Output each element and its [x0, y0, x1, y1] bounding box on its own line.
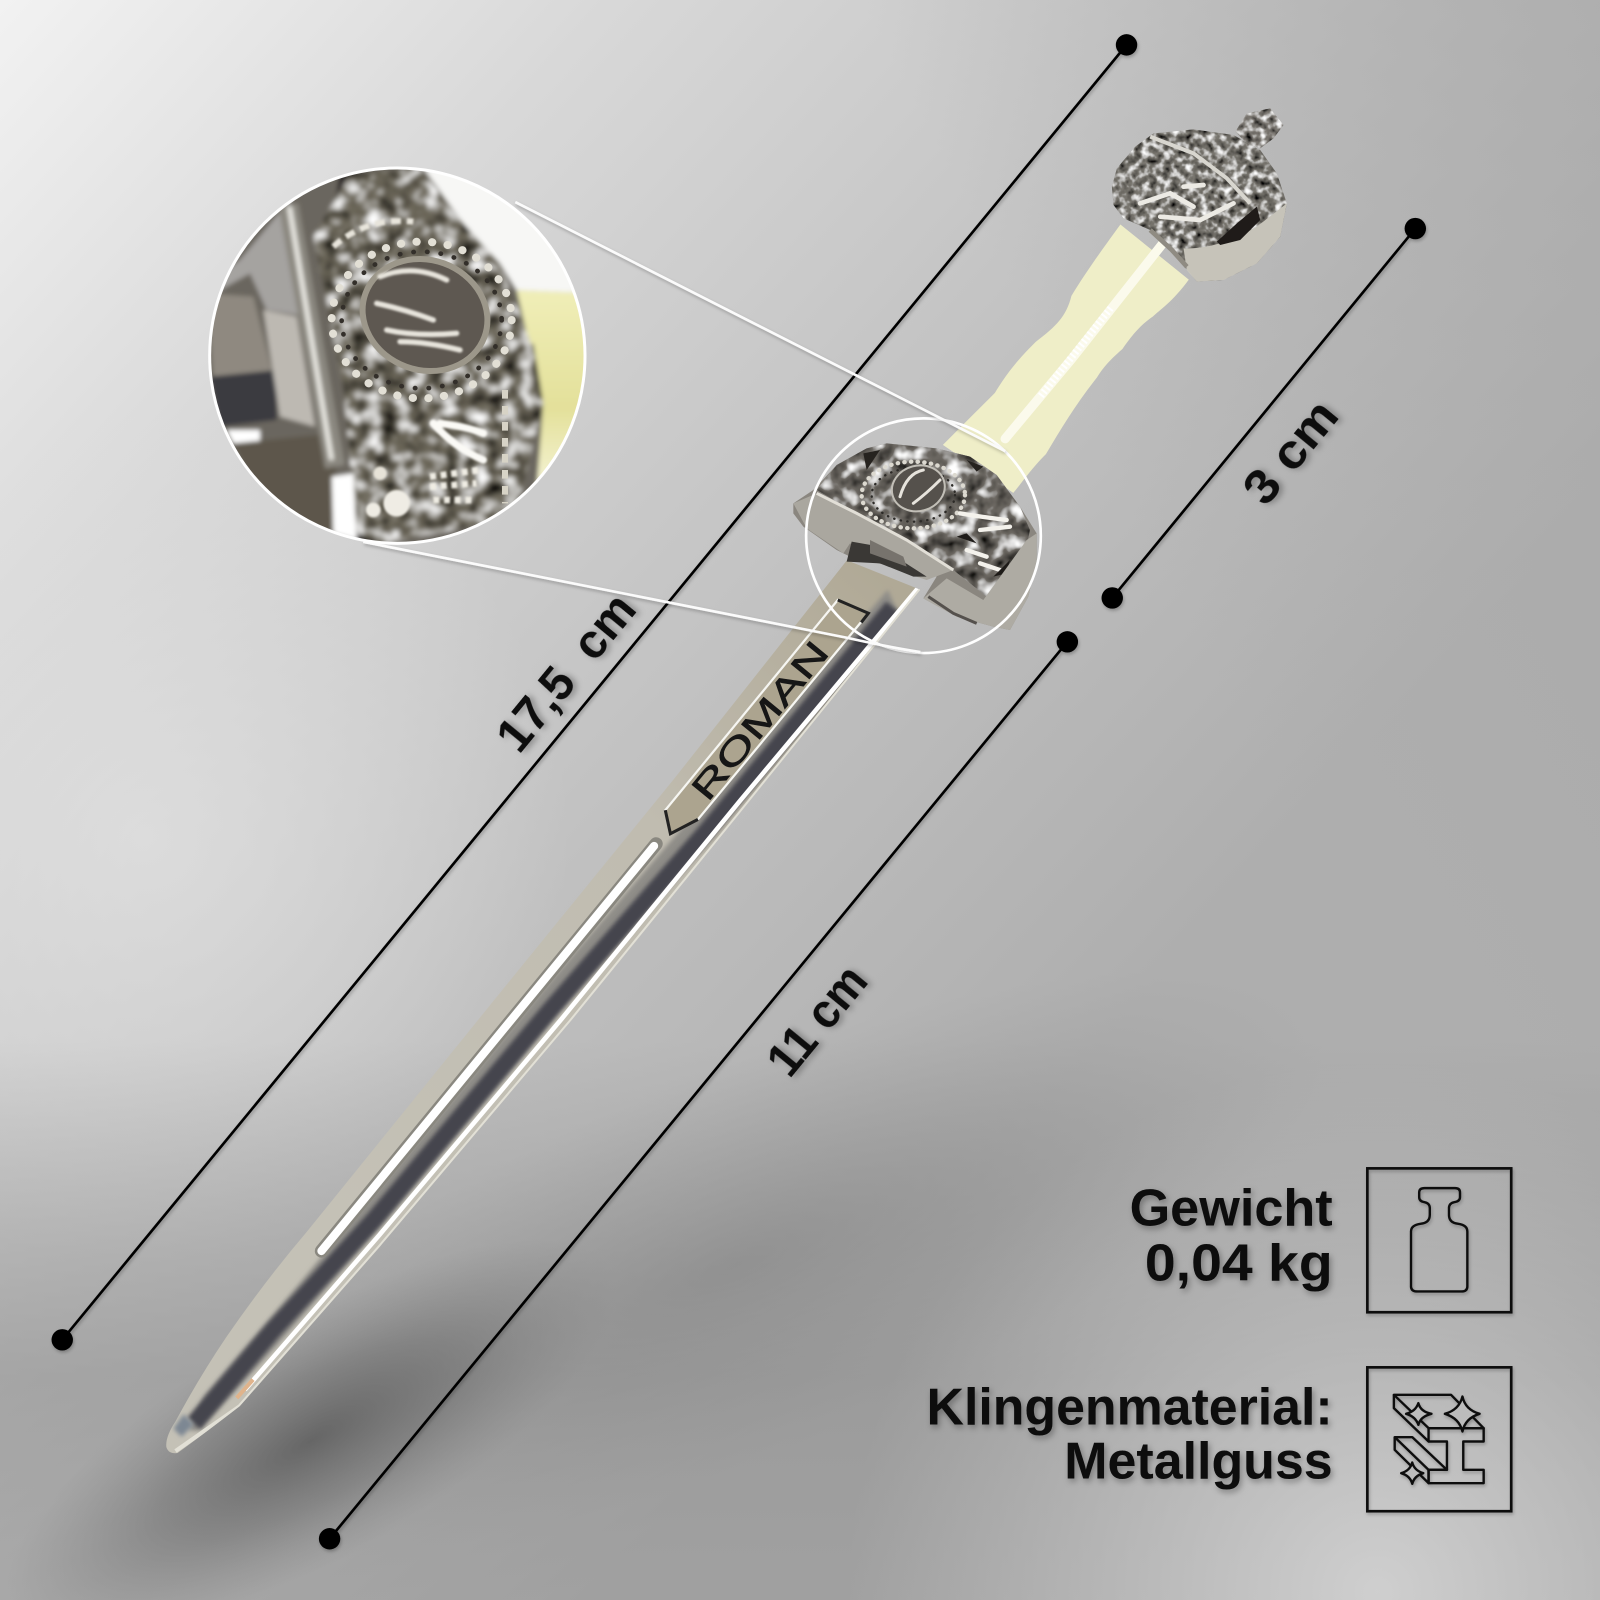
detail lens: guard emblem enlarged	[208, 166, 586, 545]
dimension line: total length 17,5 cm	[52, 34, 1137, 1351]
guard flat face	[793, 493, 953, 580]
weight text	[1130, 1180, 1333, 1293]
blade engraving: ROMAN plate	[665, 600, 868, 834]
blade material text: Klingenmaterial:	[927, 1378, 1333, 1436]
label: 3 cm: 3 cm	[1233, 390, 1349, 515]
icon: weight in box	[1367, 1168, 1511, 1312]
sword	[166, 108, 1287, 1453]
pommel	[1112, 108, 1287, 282]
blade	[166, 560, 923, 1453]
blade material text: Metallguss	[1064, 1433, 1333, 1491]
weight text: Gewicht	[1130, 1180, 1333, 1238]
dimension line: blade 11 cm	[319, 631, 1078, 1549]
connector lines from magnifier to detail	[363, 202, 1005, 652]
magnifier ring on guard	[806, 418, 1041, 653]
emblem oval and beads	[332, 221, 512, 517]
engraved text: ROMAN	[684, 634, 837, 808]
icon: metal casting in box	[1367, 1367, 1511, 1511]
label: 11 cm: 11 cm	[757, 955, 878, 1086]
blade material text	[927, 1378, 1333, 1491]
guard	[793, 443, 1037, 630]
label: 17,5 cm: 17,5 cm	[487, 583, 647, 762]
handle	[943, 224, 1189, 493]
dimension line: handle 3 cm	[1102, 218, 1426, 609]
weight text: 0,04 kg	[1145, 1235, 1333, 1293]
guard emblem	[862, 450, 1010, 577]
